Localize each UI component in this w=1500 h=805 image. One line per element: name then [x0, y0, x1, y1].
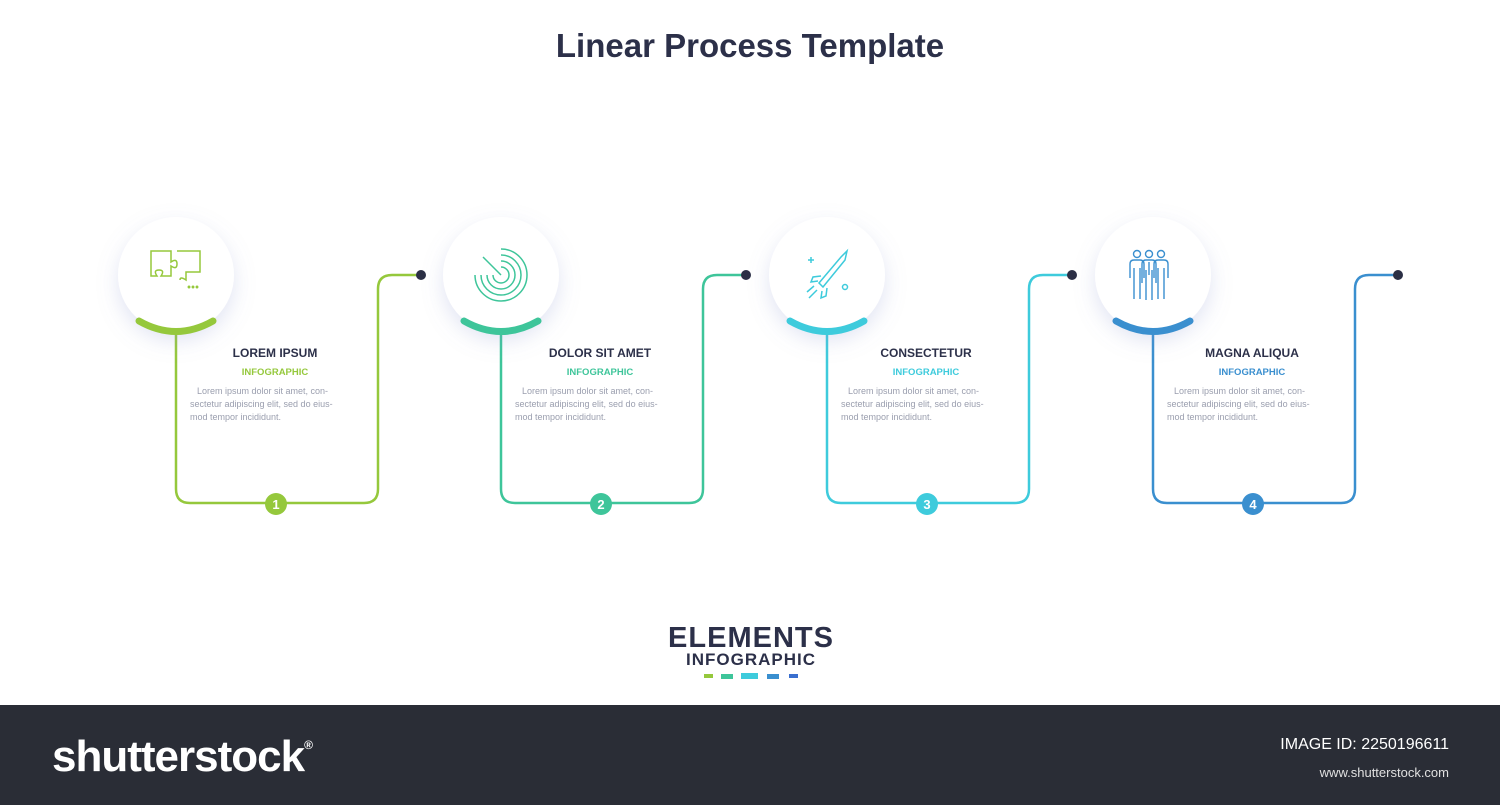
step 2: [443, 217, 751, 515]
icon circle 2: [443, 217, 559, 333]
text block 2: DOLOR SIT AMET: [549, 346, 652, 360]
text block 2: [515, 346, 658, 422]
icon circle 3: [769, 217, 885, 333]
connector line 4: [1153, 275, 1398, 503]
arc 4: [1116, 321, 1190, 332]
footer brand: shutterstock: [52, 732, 304, 781]
footer bar: www.shutterstock.com: [1319, 765, 1449, 780]
text block 1: [190, 346, 333, 422]
footer bar: [0, 705, 1500, 805]
icon circle 4: [1095, 217, 1211, 333]
text block 1: sectetur adipiscing elit, sed do eius-: [190, 399, 333, 409]
number badge 3: [916, 493, 938, 515]
icon: puzzle: [151, 251, 200, 288]
text block 4: [1167, 346, 1310, 422]
text block 2: sectetur adipiscing elit, sed do eius-: [515, 399, 658, 409]
icon: team: [1130, 250, 1168, 300]
text block 2: INFOGRAPHIC: [567, 367, 633, 378]
logo: elements infographic: INFOGRAPHIC: [686, 650, 816, 669]
connector line 2: [501, 275, 746, 503]
text block 4: INFOGRAPHIC: [1219, 367, 1285, 378]
text block 4: mod tempor incididunt.: [1167, 412, 1258, 422]
logo: elements infographic: ELEMENTS: [668, 622, 834, 654]
step 1: [118, 217, 426, 515]
text block 1: Lorem ipsum dolor sit amet, con-: [197, 386, 328, 396]
number badge 1: 1: [272, 497, 280, 512]
number badge 4: [1242, 493, 1264, 515]
text block 3: [841, 346, 984, 422]
title: Linear Process Template: [556, 27, 944, 64]
text block 3: CONSECTETUR: [880, 346, 972, 360]
arc 1: [139, 321, 213, 332]
logo: elements infographic: [668, 622, 834, 679]
step 3: [769, 217, 1077, 515]
text block 4: sectetur adipiscing elit, sed do eius-: [1167, 399, 1310, 409]
end dot 2: [741, 270, 751, 280]
connector line 1: [176, 275, 421, 503]
icon: rocket: [807, 251, 848, 298]
icon circle 1: [118, 217, 234, 333]
end dot 3: [1067, 270, 1077, 280]
text block 2: Lorem ipsum dolor sit amet, con-: [522, 386, 653, 396]
arc 3: [790, 321, 864, 332]
footer brand: ®: [304, 738, 313, 752]
text block 1: INFOGRAPHIC: [242, 367, 308, 378]
icon: radar: [475, 249, 527, 301]
text block 2: mod tempor incididunt.: [515, 412, 606, 422]
text block 1: LOREM IPSUM: [233, 346, 317, 360]
number badge 3: 3: [923, 497, 931, 512]
number badge 2: [590, 493, 612, 515]
text block 3: sectetur adipiscing elit, sed do eius-: [841, 399, 984, 409]
footer image id: IMAGE ID: 2250196611: [1280, 736, 1449, 753]
text block 1: mod tempor incididunt.: [190, 412, 281, 422]
connector line 3: [827, 275, 1072, 503]
end dot 1: [416, 270, 426, 280]
number badge 4: 4: [1249, 497, 1257, 512]
end dot 4: [1393, 270, 1403, 280]
number badge 2: 2: [597, 497, 605, 512]
arc 2: [464, 321, 538, 332]
text block 4: MAGNA ALIQUA: [1205, 346, 1299, 360]
text block 4: Lorem ipsum dolor sit amet, con-: [1174, 386, 1305, 396]
text block 3: mod tempor incididunt.: [841, 412, 932, 422]
step 4: [1095, 217, 1403, 515]
text block 3: INFOGRAPHIC: [893, 367, 959, 378]
text block 3: Lorem ipsum dolor sit amet, con-: [848, 386, 979, 396]
number badge 1: [265, 493, 287, 515]
